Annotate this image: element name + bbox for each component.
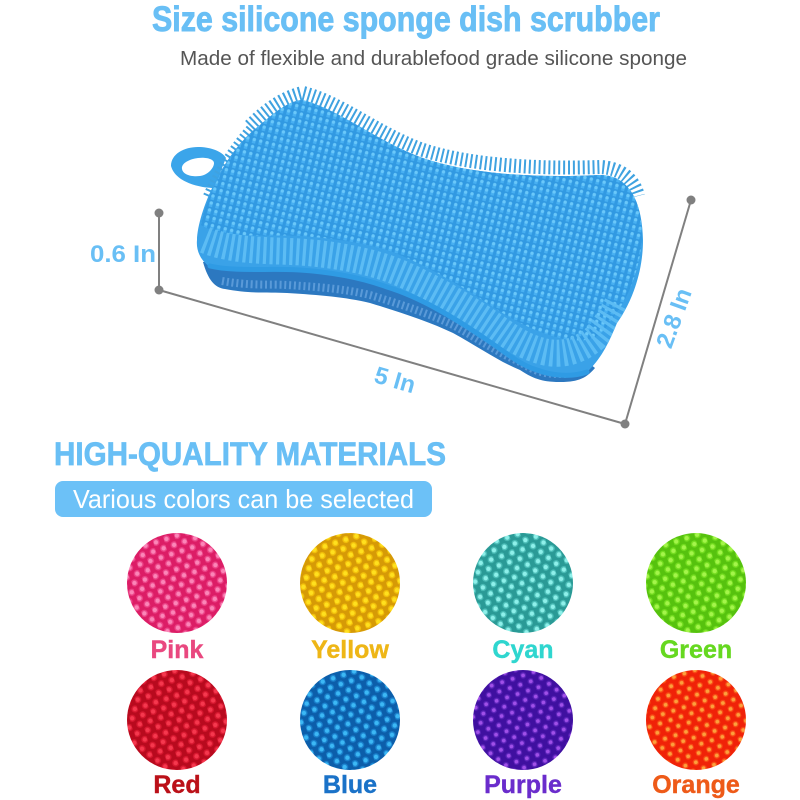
swatch: green: Green bbox=[660, 636, 732, 664]
swatch: blue: Blue bbox=[323, 771, 377, 799]
swatch: blue bbox=[300, 670, 400, 799]
sponge front bristle skirt bbox=[205, 240, 618, 353]
label: 0.6 In: 0.6 In bbox=[90, 241, 156, 268]
sponge mid rim bbox=[210, 266, 587, 375]
swatch: red: Red bbox=[153, 771, 201, 799]
swatch: orange: Orange bbox=[652, 771, 740, 799]
label: 2.8 In: 2.8 In bbox=[651, 285, 698, 352]
dimension line: height bbox=[154, 208, 164, 294]
subtitle: Made of flexible and durablefood grade silicone sponge bbox=[180, 48, 687, 70]
dimension line: width bbox=[620, 196, 696, 428]
swatch: purple: Purple bbox=[484, 771, 562, 799]
banner: various colors: Various colors can be selected bbox=[73, 484, 414, 514]
swatch: green bbox=[646, 533, 746, 664]
sponge top fringe bristles bbox=[250, 93, 638, 196]
swatch: red bbox=[127, 670, 227, 799]
swatch: yellow: Yellow bbox=[311, 636, 389, 664]
swatch: orange bbox=[646, 670, 746, 799]
swatch: pink bbox=[127, 533, 227, 664]
swatch: cyan: Cyan bbox=[492, 636, 554, 664]
dimension line: length bbox=[159, 290, 625, 424]
sponge body bbox=[197, 100, 643, 375]
swatch: cyan bbox=[473, 533, 573, 664]
label: 5 In: 5 In bbox=[371, 362, 418, 399]
sponge lower dark layer bbox=[203, 250, 595, 382]
title: Size silicone sponge dish scrubber bbox=[152, 0, 660, 39]
sponge top face bristle field bbox=[201, 100, 642, 340]
product illustration: blue silicone sponge bbox=[171, 93, 643, 382]
sponge left short bristles bbox=[207, 126, 252, 196]
swatch: purple bbox=[473, 670, 573, 799]
sponge lower layer bristle ticks bbox=[222, 281, 590, 374]
heading: high-quality materials: HIGH-QUALITY MATERIALS bbox=[54, 436, 446, 472]
swatch: pink: Pink bbox=[151, 636, 203, 664]
sponge hanging loop bbox=[171, 147, 226, 188]
swatch: yellow bbox=[300, 533, 400, 664]
